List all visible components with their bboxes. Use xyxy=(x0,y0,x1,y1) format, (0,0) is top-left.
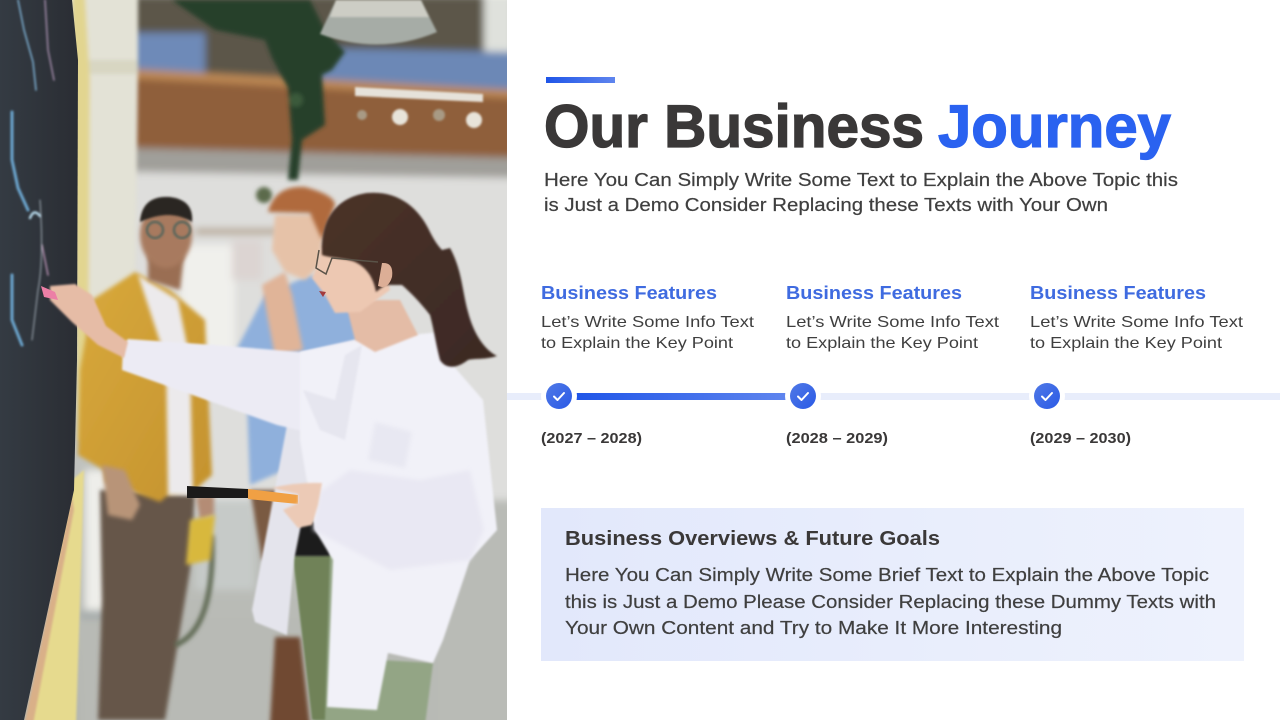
jacket xyxy=(78,272,212,502)
glasses xyxy=(147,222,190,238)
trousers xyxy=(98,490,195,720)
face xyxy=(312,240,390,313)
tee xyxy=(138,275,193,495)
milestone 2 check icon xyxy=(785,378,821,414)
feature column 3 xyxy=(1030,283,1244,352)
neck xyxy=(148,255,184,290)
panel body text: this is Just a Demo Please Consider Replacing these Dummy Texts with xyxy=(565,591,1216,612)
photo: hanging plant xyxy=(172,0,345,203)
panel heading: Business Overviews & Future Goals xyxy=(565,527,940,550)
notebook xyxy=(187,486,298,504)
photo: pendant lamp xyxy=(320,0,437,45)
accent bar xyxy=(546,77,615,83)
blue and pink chalk marks xyxy=(12,0,54,345)
holding hand xyxy=(272,483,322,528)
hand on chin xyxy=(262,272,303,356)
panel: business overviews and future goals xyxy=(541,508,1244,661)
milestone 1 check icon xyxy=(541,378,577,414)
milestone 3 check icon xyxy=(1029,378,1065,414)
ear xyxy=(378,263,392,287)
feature column 3: to Explain the Key Point xyxy=(1030,335,1223,352)
feature column 2: Business Features xyxy=(786,283,962,303)
photo: shelf lights xyxy=(355,87,483,128)
other hand xyxy=(196,495,214,520)
panel body text xyxy=(565,564,1216,638)
lower body xyxy=(270,637,310,720)
shirt xyxy=(232,275,365,485)
glasses xyxy=(316,250,378,274)
timeline xyxy=(507,378,1280,414)
hair and ponytail xyxy=(322,193,497,367)
photo: standing man in yellow jacket xyxy=(78,197,214,720)
hand xyxy=(102,465,140,520)
hair xyxy=(268,187,335,240)
feature column 2: Let’s Write Some Info Text xyxy=(786,314,1000,331)
chalk xyxy=(41,286,58,300)
photo: bicycle wheel xyxy=(175,515,215,645)
neck xyxy=(345,300,418,352)
photo: man in blue shirt xyxy=(232,187,365,720)
subtitle: Here You Can Simply Write Some Text to Explain the Above Topic this xyxy=(544,169,1178,190)
shirt back panel xyxy=(251,426,306,636)
head xyxy=(140,202,192,268)
feature column 2 xyxy=(786,283,1000,352)
timeline progress segment xyxy=(572,393,786,400)
photo: woman writing on chalkboard with two colleagues xyxy=(0,0,520,720)
lips xyxy=(319,291,326,297)
date labels: (2028 – 2029) xyxy=(786,430,888,447)
subtitle xyxy=(544,169,1178,215)
date labels xyxy=(541,430,1131,447)
photo: pillar xyxy=(72,0,138,440)
feature column 3: Business Features xyxy=(1030,283,1206,303)
photo: chalkboard with writing xyxy=(0,0,78,720)
feature column 1: to Explain the Key Point xyxy=(541,335,734,352)
dark belt area xyxy=(292,522,332,556)
shirt body xyxy=(300,332,497,710)
pocket xyxy=(372,426,408,464)
feature column 1 xyxy=(541,283,755,352)
face xyxy=(272,215,325,280)
photo: yellow board ledge xyxy=(24,470,84,720)
sleeve xyxy=(120,338,358,428)
lower sleeve shading xyxy=(313,470,484,570)
collar xyxy=(303,345,362,440)
feature column 3: Let’s Write Some Info Text xyxy=(1030,314,1244,331)
feature column 2: to Explain the Key Point xyxy=(786,335,979,352)
feature column 1: Business Features xyxy=(541,283,717,303)
subtitle: is Just a Demo Consider Replacing these Texts with Your Own xyxy=(544,194,1108,215)
green trousers xyxy=(293,555,433,720)
panel body text: Your Own Content and Try to Make It More Interesting xyxy=(565,617,1062,638)
title: Our Business xyxy=(544,93,924,160)
hair xyxy=(140,197,192,222)
date labels: (2027 – 2028) xyxy=(541,430,642,447)
photo background: room xyxy=(0,0,520,720)
forearm and hand xyxy=(50,284,128,358)
date labels: (2029 – 2030) xyxy=(1030,430,1131,447)
feature column 1: Let’s Write Some Info Text xyxy=(541,314,755,331)
title xyxy=(544,93,1172,160)
photo: woman in white shirt xyxy=(41,193,497,720)
panel body text: Here You Can Simply Write Some Brief Text to Explain the Above Topic xyxy=(565,564,1209,585)
title: Journey xyxy=(938,93,1172,160)
